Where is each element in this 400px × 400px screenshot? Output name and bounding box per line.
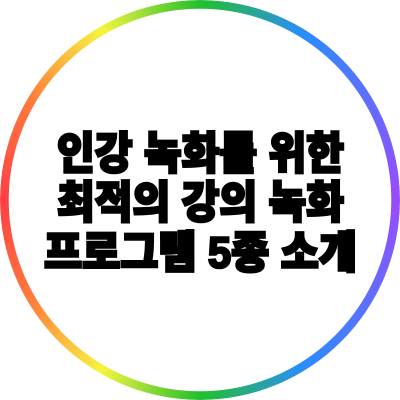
- title line 1: 인강 녹화를 위한: [57, 130, 344, 178]
- title line 2: 최적의 강의 녹화: [57, 178, 344, 228]
- title line 3: 프로그램 5종 소개: [44, 228, 357, 278]
